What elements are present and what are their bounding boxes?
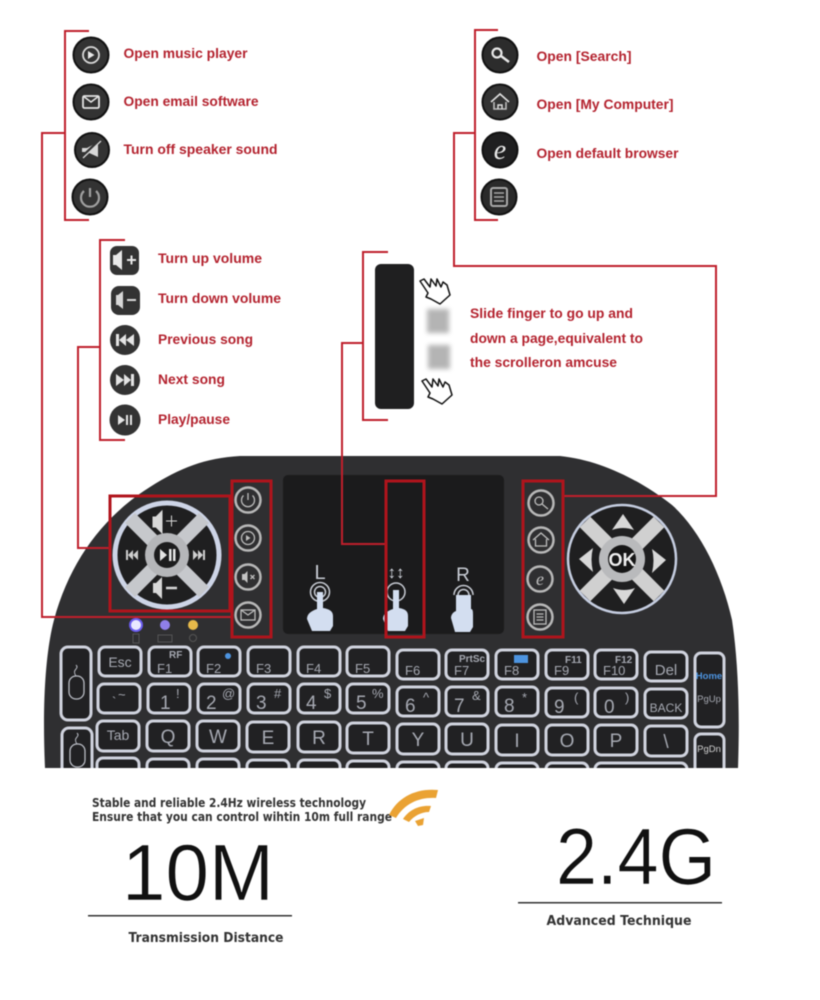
keys: function row: Esc	[108, 654, 132, 670]
left function buttons	[236, 488, 260, 628]
keys: function row: F2	[206, 661, 221, 676]
keys: function row: F4	[306, 661, 321, 676]
keys: number row: 1	[160, 693, 171, 714]
keys: function row: F8	[504, 663, 519, 678]
icon: browser	[482, 132, 518, 168]
button: home	[528, 528, 554, 552]
keys: function row: RF	[169, 650, 182, 661]
side keys: navigation: Home	[696, 671, 722, 682]
icon: top hand	[420, 279, 450, 304]
keys: letter row: O	[560, 731, 574, 752]
keys: function row: F1	[157, 661, 172, 676]
keys: number row: 2	[206, 693, 217, 714]
icon: next song	[110, 365, 140, 395]
white mask below the keyboard	[0, 768, 820, 1000]
bracket: top right	[454, 30, 716, 496]
icon: wifi	[389, 790, 438, 826]
text: scroll description: down a page,equivalent to	[470, 331, 643, 346]
side keys: navigation	[695, 653, 724, 794]
keys: number row: 4	[306, 693, 317, 714]
stat: 10M: Transmission Distance	[128, 931, 284, 946]
text: scroll description: Slide finger to go up and	[470, 306, 633, 321]
text: wireless description: Stable and reliable 2.4Hz wireless technology	[92, 796, 366, 810]
keys: number row: BACK	[650, 701, 682, 715]
label: open search: Open [Search]	[536, 49, 632, 64]
icon: browser: e	[494, 135, 506, 166]
keys: letter row: I	[514, 731, 520, 752]
label: open email software: Open email software	[124, 94, 259, 109]
keys: number row: &	[472, 688, 481, 703]
callout group: scroll strip	[342, 252, 643, 544]
keyboard body	[44, 456, 739, 768]
label: previous song: Previous song	[158, 332, 253, 347]
touchpad	[283, 475, 504, 634]
red highlight boxes	[110, 481, 563, 637]
button: browser: e	[536, 569, 544, 589]
keys: number row: 6	[405, 696, 416, 717]
icon: music player	[74, 38, 108, 72]
button: email	[236, 602, 260, 628]
navigation d-pad: OK	[608, 550, 636, 570]
bracket: media	[78, 240, 125, 548]
label: open my computer: Open [My Computer]	[536, 97, 674, 112]
callout group: top left functions	[42, 31, 278, 617]
icon: play pause	[110, 404, 140, 436]
touch gesture: left click	[307, 562, 333, 631]
keys: number row: @	[222, 686, 235, 701]
keys: function row: Del	[655, 662, 677, 679]
icon: menu	[482, 180, 516, 214]
keys: function row: F5	[355, 661, 370, 676]
keys: letter row: T	[362, 729, 374, 750]
keys: letter row: U	[460, 730, 474, 751]
touch gesture: scroll: ↕↕	[388, 563, 404, 582]
stat: 2.4G: 2.4G	[556, 812, 716, 901]
button: music	[236, 526, 260, 550]
keys: number row	[98, 684, 687, 718]
stat: 2.4G	[518, 812, 722, 929]
keys: letter row: Y	[412, 730, 425, 751]
button: search	[528, 490, 554, 516]
bracket: top left	[42, 31, 232, 617]
side keys: navigation: PgDn	[697, 744, 721, 755]
keys: function row: PrtSc	[459, 654, 486, 665]
icon: previous song	[110, 325, 140, 355]
keys: letter row: E	[262, 728, 274, 749]
keys: letter row: Tab	[107, 727, 129, 743]
label: next song: Next song	[158, 372, 225, 387]
stat: 10M: 10M	[122, 828, 274, 917]
keys: number row: #	[274, 686, 282, 701]
side keys: mouse	[61, 647, 92, 788]
panel: keyboard photo	[44, 456, 739, 794]
icon: mute	[75, 133, 109, 167]
right function buttons	[528, 490, 554, 630]
keys: number row: %	[372, 686, 384, 701]
callout group: media controls	[78, 240, 282, 548]
keys: number row: 8	[504, 696, 515, 717]
keys: letter row: R	[312, 728, 326, 749]
icon: bottom hand	[422, 379, 452, 404]
touch gesture: right click	[451, 565, 473, 632]
scroll strip	[375, 264, 414, 409]
button: power	[236, 488, 260, 512]
label: play pause: Play/pause	[158, 412, 230, 427]
text: wireless description	[92, 796, 392, 824]
icon: power	[72, 180, 108, 214]
keys: number row: `	[112, 694, 116, 709]
touch gesture: right click: R	[456, 565, 470, 586]
side keys: navigation: PgUp	[697, 694, 721, 705]
stat: 10M	[88, 828, 292, 946]
keys: function row: F11	[565, 655, 582, 666]
box: media d-pad	[110, 496, 230, 611]
label: turn up volume: Turn up volume	[158, 251, 263, 266]
keys: function row: F6	[405, 663, 420, 678]
text: scroll description	[470, 306, 643, 370]
label: turn down volume: Turn down volume	[158, 291, 282, 306]
keys: number row: *	[522, 690, 527, 705]
callout group: top right functions	[454, 30, 716, 496]
label: turn off speaker sound: Turn off speaker sound	[124, 142, 278, 157]
keys: number row: (	[574, 690, 579, 705]
keys: function row: F7	[454, 663, 469, 678]
icon: home	[482, 84, 518, 120]
box: right buttons	[523, 481, 563, 637]
icon: search	[482, 38, 518, 72]
touch gesture: left click: L	[314, 562, 326, 584]
text: wireless description: Ensure that you can control wihtin 10m full range	[92, 810, 392, 824]
keys: function row: F9	[554, 663, 569, 678]
button: mute	[236, 564, 260, 590]
icon: faded hands	[427, 309, 450, 369]
keys: number row: )	[625, 690, 629, 705]
stat: 2.4G: Advanced Technique	[546, 914, 692, 929]
keys: letter row: \	[663, 732, 669, 753]
status LEDs	[130, 619, 198, 643]
keys: function row: F12	[615, 655, 633, 666]
keys: function row	[99, 647, 687, 681]
text: scroll description: the scrolleron amcuse	[470, 355, 617, 370]
navigation d-pad	[568, 505, 676, 613]
icon: volume up	[110, 246, 139, 275]
button: menu	[528, 604, 552, 630]
label: open default browser: Open default browser	[536, 146, 679, 161]
touch gesture: scroll	[383, 563, 408, 631]
keys: number row: $	[324, 686, 332, 701]
box: left buttons	[232, 481, 271, 637]
keys: letter row: W	[209, 727, 227, 748]
keys: number row: 7	[454, 696, 465, 717]
keys: number row: 5	[356, 693, 367, 714]
keys: letter row	[97, 721, 687, 756]
keys: function row: F3	[256, 661, 271, 676]
keys: number row: ^	[423, 690, 430, 705]
label: open music player: Open music player	[124, 46, 248, 61]
icon: email	[74, 84, 108, 120]
keys: number row: 0	[604, 697, 615, 718]
media d-pad	[115, 503, 219, 607]
keys: letter row: Q	[161, 727, 175, 748]
keys: number row: ~	[118, 687, 126, 702]
icon: volume down	[111, 286, 140, 315]
keys: bottom row cut off	[97, 758, 687, 793]
box: scroll zone	[386, 481, 424, 637]
keys: number row: !	[176, 686, 180, 701]
keys: letter row: P	[610, 731, 622, 752]
keys: number row: 3	[256, 693, 267, 714]
keys: function row: F10	[603, 663, 625, 678]
bracket: scroll	[342, 252, 388, 544]
keys: number row: 9	[554, 697, 565, 718]
